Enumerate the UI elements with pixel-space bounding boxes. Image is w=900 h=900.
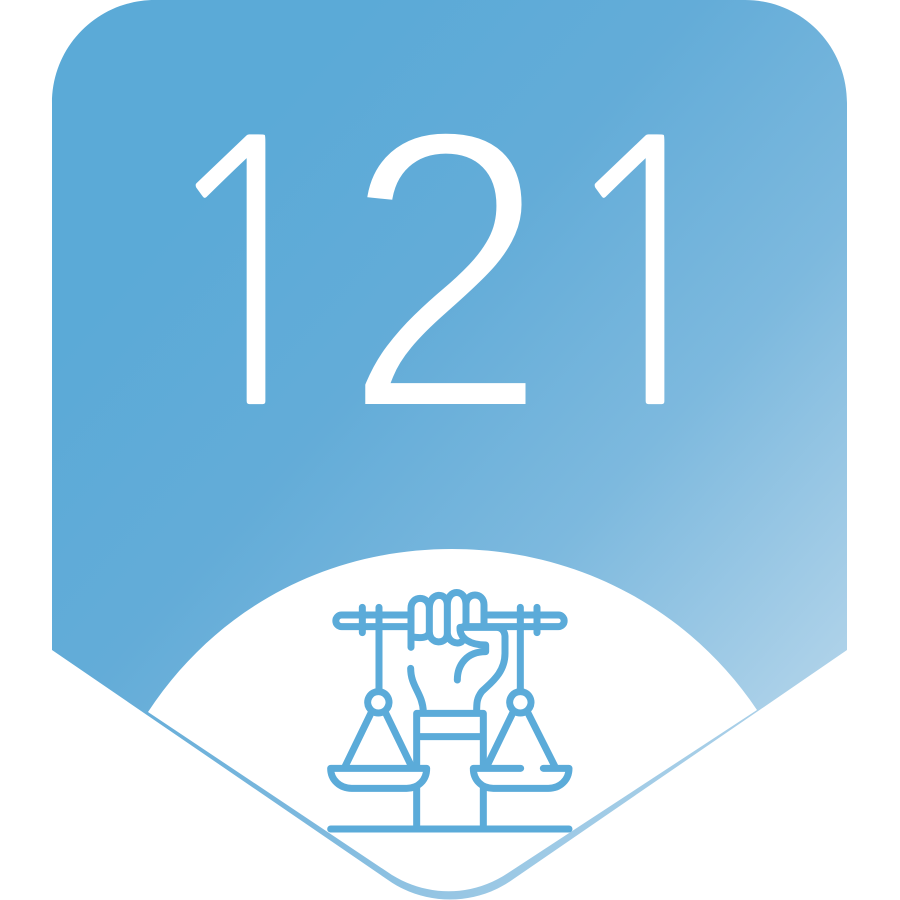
icon: cuff and forearm bbox=[417, 713, 483, 828]
icon: hanging strings bbox=[362, 607, 537, 690]
digit 2: 2 bbox=[342, 46, 548, 494]
digit 1 left: 1 bbox=[148, 91, 344, 458]
icon: fist holding scales bbox=[331, 592, 569, 829]
icon: fist bbox=[411, 592, 505, 712]
icon: base line bbox=[331, 818, 569, 839]
icon: horizontal bar bbox=[336, 615, 564, 627]
icon: left scale bbox=[331, 692, 427, 788]
number 121 bbox=[148, 46, 743, 494]
icon: right scale bbox=[473, 692, 569, 788]
white arc panel bbox=[148, 549, 757, 891]
digit 1 right: 1 bbox=[547, 91, 743, 458]
